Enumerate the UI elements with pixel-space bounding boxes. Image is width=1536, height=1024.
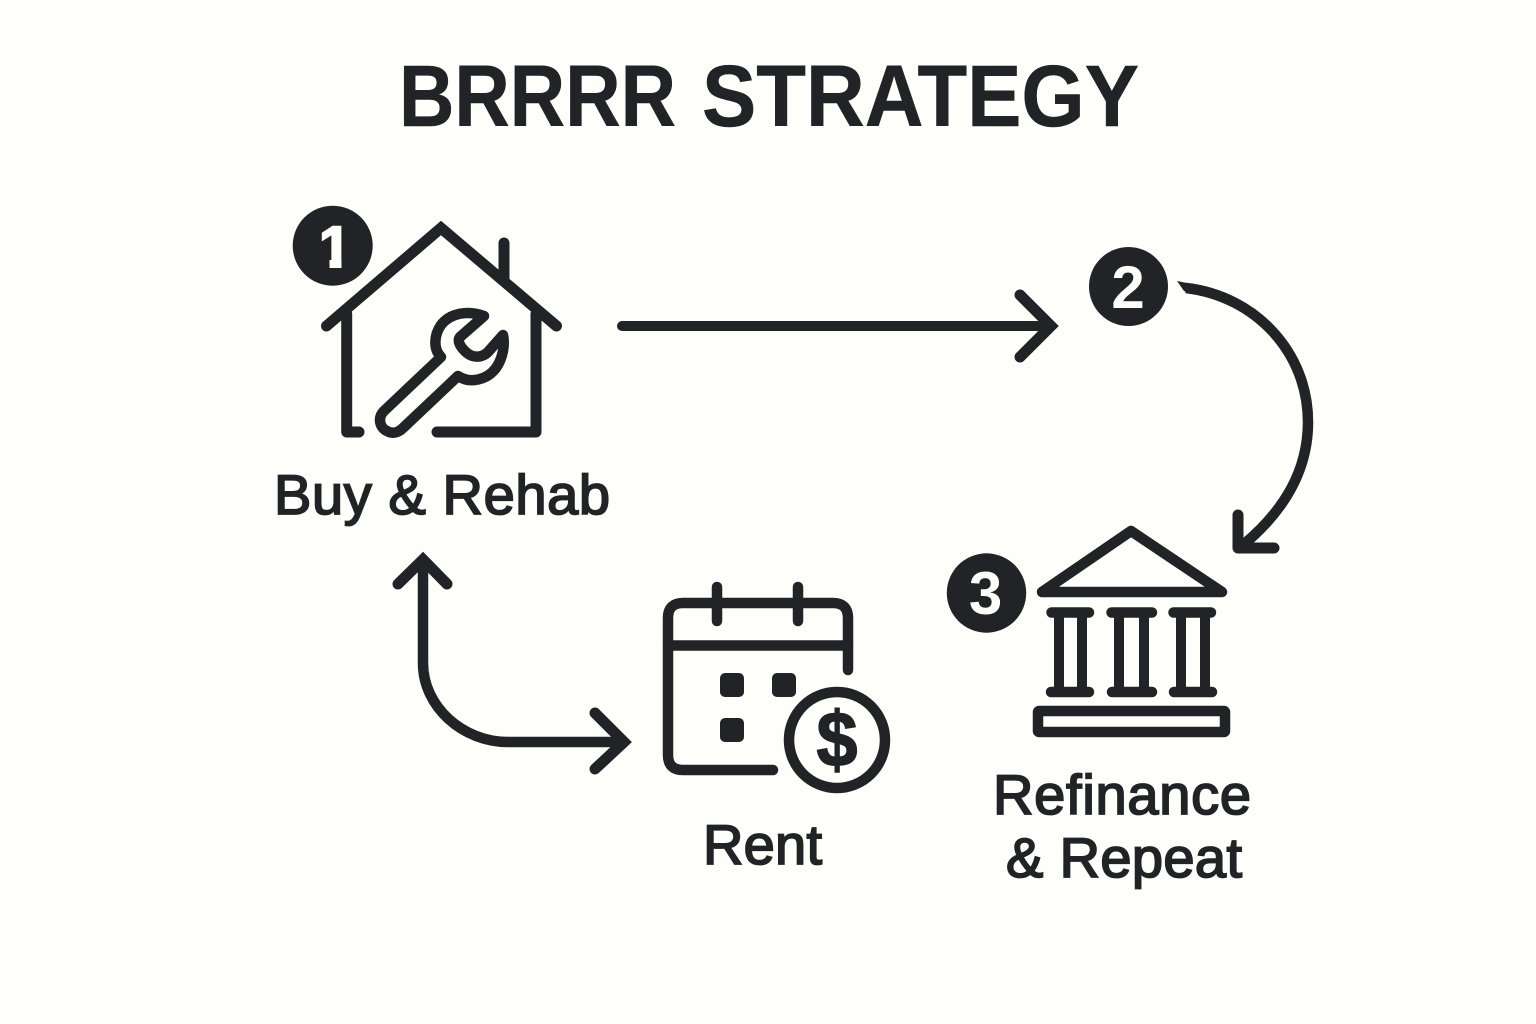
badge 1: 1 xyxy=(319,215,351,280)
arrow: step 1 to step 2 xyxy=(622,295,1051,357)
label: refinance and repeat: Refinance xyxy=(993,763,1251,826)
title xyxy=(399,48,1139,145)
label: refinance and repeat: & Repeat xyxy=(1006,826,1242,889)
badge 3 xyxy=(947,553,1026,633)
badge 2 xyxy=(1089,247,1168,326)
icon: bank xyxy=(1038,531,1225,732)
badge 2: 2 xyxy=(1111,254,1145,321)
arrow: step 2 to step 3 xyxy=(1177,281,1308,548)
title: BRRRR xyxy=(399,48,676,145)
icon: calendar with dollar: $ xyxy=(816,695,858,783)
badge 1 xyxy=(293,206,373,286)
label: rent: Rent xyxy=(703,813,822,876)
label: buy and rehab: Buy & Rehab xyxy=(274,463,610,526)
badge 3: 3 xyxy=(969,560,1002,627)
icon: house with wrench xyxy=(326,228,556,433)
title: STRATEGY xyxy=(702,48,1139,145)
label: refinance and repeat xyxy=(993,763,1251,889)
icon: calendar with dollar xyxy=(668,587,885,788)
arrow: rent back to step 1 xyxy=(398,560,624,769)
